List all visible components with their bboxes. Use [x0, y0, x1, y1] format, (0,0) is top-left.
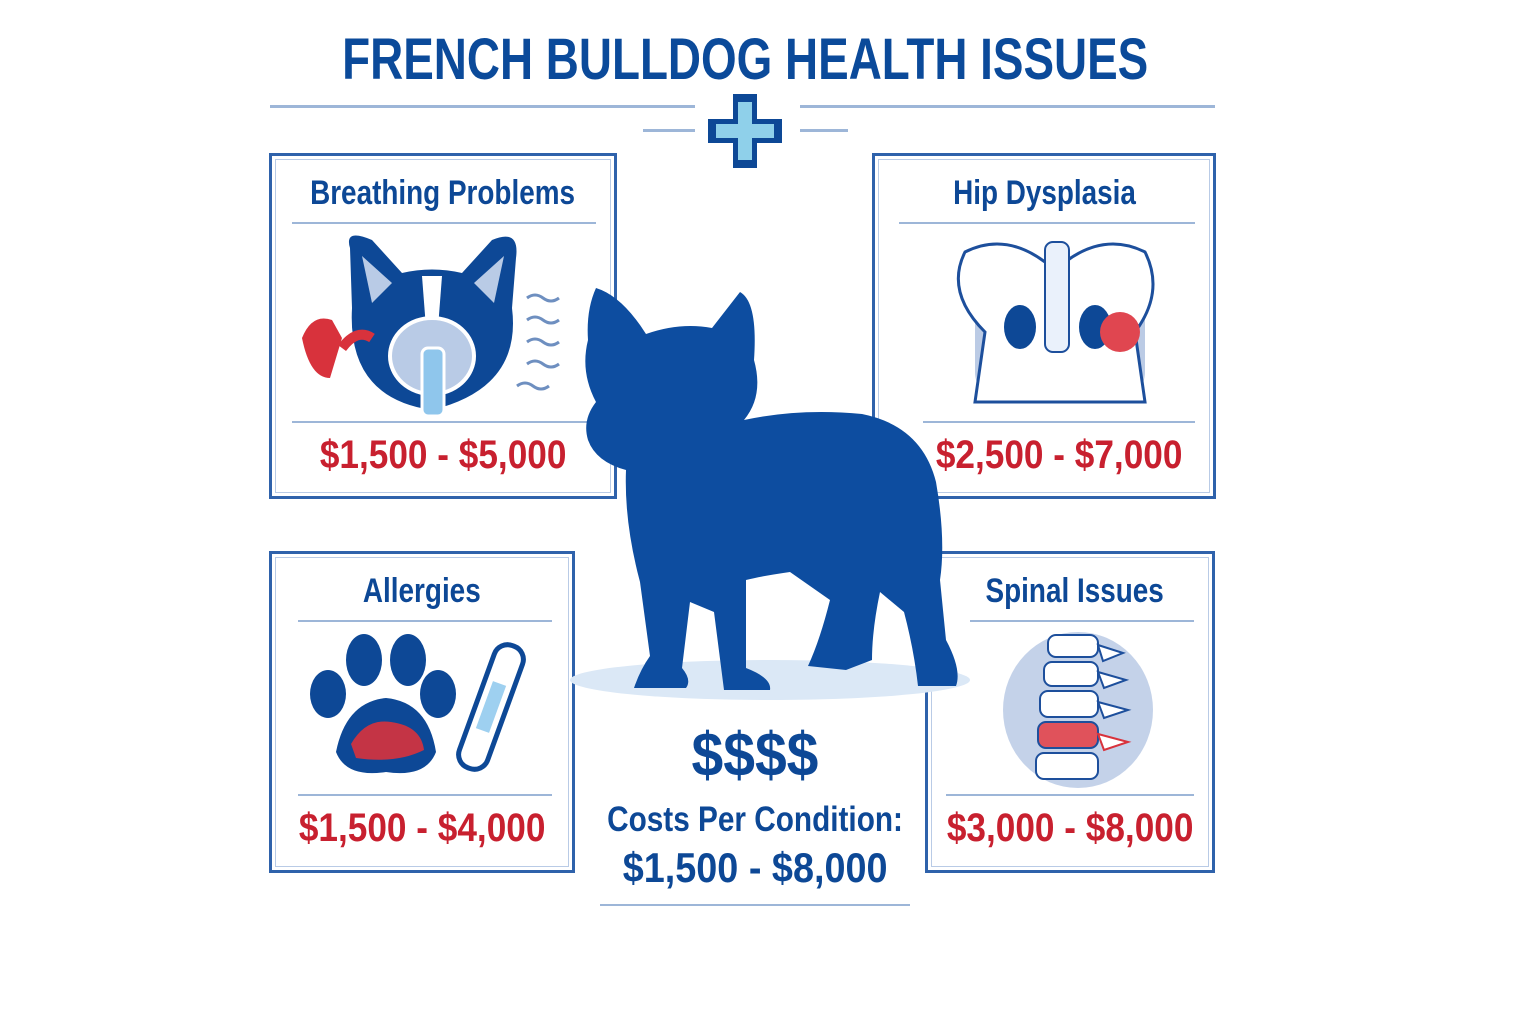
- title: FRENCH BULLDOG HEALTH ISSUES: [342, 27, 1148, 92]
- price: $1,500 - $4,000: [299, 806, 545, 850]
- icon: paw and inhaler: [310, 634, 526, 774]
- cost range: $1,500 - $8,000: [623, 844, 887, 891]
- panel: spinal issues: [925, 551, 1215, 873]
- panel: breathing problems: [269, 153, 617, 499]
- price: $2,500 - $7,000: [936, 433, 1182, 477]
- panel: allergies: [269, 551, 575, 873]
- panel: hip dysplasia: [872, 153, 1216, 499]
- dollar signs: $$$$: [692, 721, 818, 790]
- icon: spine: [1003, 632, 1153, 788]
- icon: bulldog face with mask: [302, 236, 560, 414]
- costs label: Costs Per Condition:: [607, 800, 903, 839]
- cost summary: [600, 721, 910, 906]
- icon: pelvis: [956, 241, 1154, 404]
- heading: Breathing Problems: [311, 174, 575, 212]
- heading: Spinal Issues: [986, 572, 1164, 610]
- price: $3,000 - $8,000: [947, 806, 1193, 850]
- heading: Hip Dysplasia: [953, 174, 1135, 212]
- heading: Allergies: [363, 572, 481, 610]
- price: $1,500 - $5,000: [320, 433, 566, 477]
- icon: medical cross: [708, 94, 782, 168]
